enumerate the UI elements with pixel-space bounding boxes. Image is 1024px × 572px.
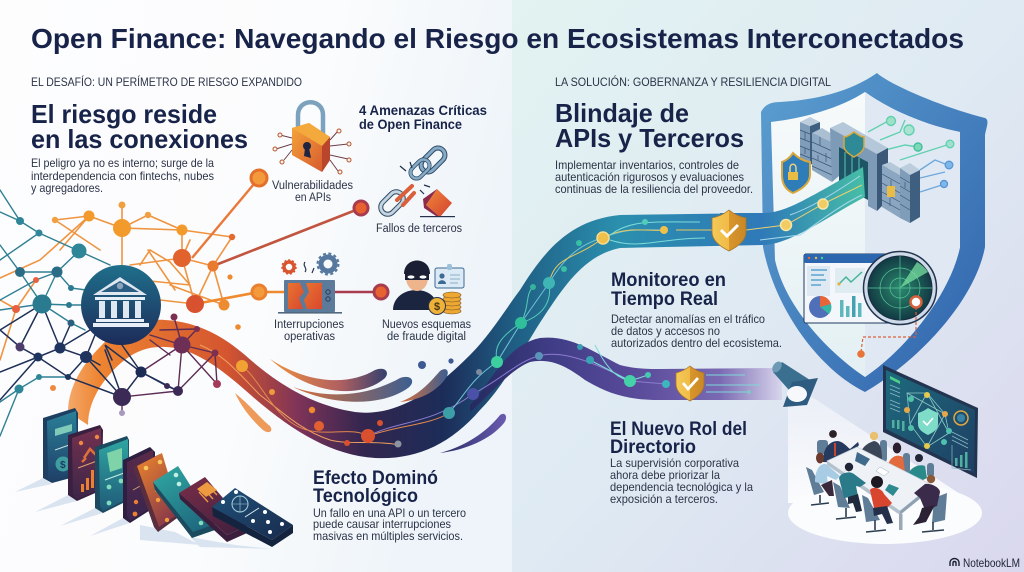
- icon: spotlight lamp: [770, 360, 818, 407]
- label: Interrupciones: [274, 319, 344, 343]
- circuit traces on ribbon: [200, 222, 760, 445]
- domino 8: [212, 488, 293, 547]
- background: right half: [512, 0, 1024, 572]
- label: Vulnerabilidades: Vulnerabilidades: [272, 180, 353, 192]
- network: connection web: [0, 190, 232, 436]
- label: Fallos de terceros: Fallos de terceros: [376, 223, 462, 235]
- label: Nuevos esquemas: Nuevos esquemas: [382, 319, 471, 331]
- icon: radar: [857, 252, 936, 358]
- text block: Blindaje: continuas de la resiliencia del proveedor.: [555, 182, 753, 196]
- icon: firewall gateway: [800, 117, 920, 223]
- network nodes: [12, 202, 241, 416]
- shield panel: [761, 73, 987, 392]
- heading: Blindaje: [555, 98, 744, 153]
- icon: dashboard window: [804, 254, 893, 323]
- heading: Blindaje: APIs y Terceros: [555, 123, 744, 153]
- connector: nodes to Interrupciones and fraude: [195, 285, 388, 304]
- board screen: [883, 365, 978, 478]
- domino 7: [179, 477, 247, 542]
- domino 1: [43, 408, 78, 483]
- text block: peligro: interdependencia con fintechs, nubes: [31, 169, 214, 183]
- icon: broken screen and gears: [278, 254, 342, 314]
- heading: 4 Amenazas: [359, 103, 487, 132]
- icon: broken chain and cube: [378, 145, 455, 217]
- label: Vulnerabilidades: [272, 180, 353, 204]
- text block: Efecto Dominó: Un fallo en una API o un tercero: [313, 506, 466, 520]
- domino 5: [133, 453, 184, 532]
- text block: Efecto Dominó: masivas en múltiples servicios.: [313, 529, 463, 543]
- heading: El Nuevo Rol: [610, 418, 747, 458]
- text block: Monitoreo: [611, 312, 782, 350]
- title: Open Finance: Navegando el Riesgo en Ecosistemas Interconectados: [31, 23, 964, 54]
- heading: El riesgo reside en las conexiones: El riesgo reside: [31, 99, 217, 129]
- icon: small gateway shield: [844, 132, 864, 157]
- heading: 4 Amenazas: de Open Finance: [359, 117, 462, 132]
- heading: El Nuevo Rol: El Nuevo Rol del: [610, 418, 747, 440]
- icon: fraudster with ID card and coins: [393, 260, 464, 314]
- table: [827, 447, 932, 511]
- heading: El riesgo reside en las conexiones: [31, 99, 248, 154]
- text block: Blindaje: Implementar inventarios, controles de: [555, 158, 739, 172]
- wall left: [800, 122, 810, 165]
- icon: fraudster with ID card and coins: $: [434, 301, 440, 313]
- text block: peligro: y agregadores.: [31, 181, 103, 195]
- icon: gold shield on purple band: [676, 366, 704, 401]
- label: Vulnerabilidades: en APIs: [295, 192, 331, 204]
- label: Nuevos esquemas: [382, 319, 471, 343]
- maroon links: [122, 317, 217, 413]
- label: Nuevos esquemas: de fraude digital: [387, 331, 466, 343]
- domino shadows: [15, 478, 272, 549]
- icon: padlock shield: [782, 153, 810, 193]
- board table and people: [806, 430, 947, 532]
- laptops and papers: [855, 452, 870, 466]
- text block: peligro: [31, 156, 214, 195]
- orange links: [0, 205, 232, 360]
- connector: node to Fallos de terceros: [213, 201, 368, 266]
- swooshes: [235, 358, 506, 453]
- label: Interrupciones: operativas: [284, 331, 335, 343]
- right section label: LA SOLUCIÓN: GOBERNANZA Y RESILIENCIA DIGITAL: [555, 76, 832, 89]
- text block: peligro: El peligro ya no es interno; surge de la: [31, 156, 214, 170]
- icon: padlock: [273, 102, 351, 174]
- ribbon nodes: [236, 219, 751, 448]
- heading: Efecto Dominó: Tecnológico: [313, 485, 418, 507]
- text block: Monitoreo: autorizados dentro del ecosistema.: [611, 336, 782, 350]
- background: left half: [0, 0, 512, 572]
- ribbon overlay: band over shield edge and gate: [720, 167, 865, 245]
- trace overlay on shield band: [746, 176, 862, 240]
- domino 2: [68, 425, 103, 501]
- domino 3: [95, 436, 129, 513]
- rear people: [823, 430, 927, 484]
- heading: Efecto Dominó: Efecto Dominó: [313, 467, 438, 489]
- connector: node to Vulnerabilidades: [192, 170, 267, 258]
- text block: El Nuevo Rol: La supervisión corporativa: [610, 456, 739, 470]
- label: Interrupciones: Interrupciones: [274, 319, 344, 331]
- ribbon: main data flow: [68, 167, 865, 458]
- domino 6: [153, 466, 215, 538]
- text block: Blindaje: autenticación rigurosos y evaluaciones: [555, 170, 744, 184]
- dominoes: [15, 408, 293, 549]
- icon: bank hub: [81, 265, 161, 345]
- teal links: [0, 190, 110, 436]
- heading: Blindaje: Blindaje de: [555, 98, 689, 128]
- text block: Blindaje: [555, 158, 753, 196]
- ribbon: purple branch: [470, 338, 782, 412]
- heading: 4 Amenazas: 4 Amenazas Críticas: [359, 103, 487, 118]
- text block: Efecto Dominó: puede causar interrupciones: [313, 517, 451, 531]
- left section label: EL DESAFÍO: UN PERÍMETRO DE RIESGO EXPANDIDO: [31, 76, 302, 89]
- text block: Efecto Dominó: [313, 506, 466, 543]
- text block: Monitoreo: Detectar anomalías en el tráfico: [611, 312, 765, 326]
- chair bases: [811, 495, 944, 532]
- text block: Monitoreo: de datos y accesos no: [611, 324, 720, 338]
- icon: gold shield on blue band: [712, 210, 746, 251]
- rear chairs: [817, 440, 934, 477]
- circuit lines behind gateway: [868, 116, 954, 192]
- heading: Monitoreo: Tiempo Real: [611, 288, 718, 310]
- text block: El Nuevo Rol: [610, 456, 753, 506]
- heading: El Nuevo Rol: Directorio: [610, 436, 696, 458]
- text block: El Nuevo Rol: ahora debe priorizar la: [610, 468, 720, 482]
- wall right: [882, 165, 900, 218]
- text block: El Nuevo Rol: exposición a terceros.: [610, 492, 718, 506]
- domino 1: $: [60, 460, 66, 471]
- heading: Efecto Dominó: [313, 467, 438, 507]
- front chairs: [806, 467, 947, 523]
- heading: Monitoreo: [611, 269, 726, 310]
- front people: [815, 452, 940, 525]
- heading: Monitoreo: Monitoreo en: [611, 269, 726, 291]
- heading: El riesgo reside en las conexiones: en las conexiones: [31, 124, 248, 154]
- navy links: [0, 304, 178, 400]
- text block: El Nuevo Rol: dependencia tecnológica y la: [610, 480, 753, 494]
- spotlight cone: [788, 397, 982, 544]
- gate: [830, 122, 888, 154]
- domino 4: [123, 447, 155, 523]
